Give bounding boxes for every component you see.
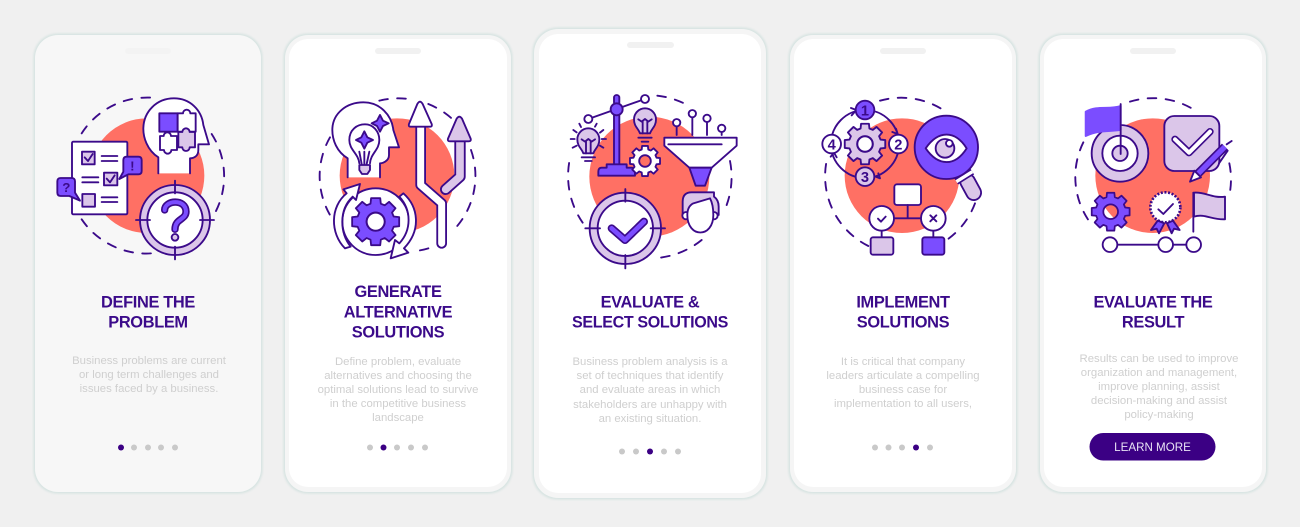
- heading: implement solutions: IMPLEMENT: [856, 294, 950, 312]
- body text: implement solutions: leaders articulate a compelling: [826, 370, 980, 382]
- illustration: implement solutions: [822, 98, 978, 255]
- body text: evaluate the result: decision-making and assist: [1091, 395, 1228, 407]
- heading: generate alternative solutions: GENERATE: [354, 283, 442, 301]
- body text: implement solutions: [826, 356, 980, 410]
- illustration: define the problem: !: [130, 158, 135, 173]
- illustration: generate alternative solutions: [320, 98, 475, 258]
- heading: define the problem: [101, 294, 195, 332]
- pagination dots: [367, 444, 428, 450]
- illustration: evaluate the result: [1075, 98, 1232, 252]
- body text: evaluate and select solutions: stakeholders are unhappy with: [573, 399, 727, 411]
- body text: implement solutions: It is critical that company: [841, 356, 965, 368]
- pagination dots: [619, 448, 681, 454]
- heading: implement solutions: [856, 294, 950, 332]
- heading: evaluate the result: EVALUATE THE: [1093, 294, 1213, 312]
- illustration: define the problem: ?: [62, 180, 70, 195]
- heading: evaluate and select solutions: SELECT SOLUTIONS: [572, 314, 728, 332]
- body text: evaluate the result: improve planning, assist: [1098, 381, 1221, 393]
- body text: generate alternative solutions: in the competitive business: [330, 398, 466, 410]
- panel: define the problem: [34, 34, 262, 494]
- body text: define the problem: issues faced by a business.: [80, 383, 218, 395]
- body text: generate alternative solutions: landscape: [372, 412, 424, 424]
- heading: generate alternative solutions: SOLUTIONS: [352, 324, 445, 342]
- body text: define the problem: [72, 355, 227, 395]
- body text: generate alternative solutions: Define problem, evaluate: [335, 356, 461, 368]
- panel: implement solutions: [788, 34, 1018, 494]
- heading: evaluate the result: RESULT: [1122, 314, 1184, 332]
- heading: generate alternative solutions: [344, 283, 453, 342]
- button: learn more: LEARN MORE: [1114, 441, 1191, 454]
- body text: generate alternative solutions: optimal solutions lead to survive: [318, 384, 478, 396]
- body text: evaluate and select solutions: Business problem analysis is a: [572, 356, 728, 368]
- body text: generate alternative solutions: alternatives and choosing the: [324, 370, 472, 382]
- heading: define the problem: PROBLEM: [108, 314, 188, 332]
- body text: define the problem: Business problems are current: [72, 355, 227, 367]
- pagination dots: [872, 444, 933, 450]
- body text: define the problem: or long term challenges and: [79, 369, 219, 381]
- heading: evaluate and select solutions: EVALUATE &: [601, 294, 700, 312]
- body text: evaluate the result: Results can be used to improve: [1080, 353, 1238, 365]
- panel: evaluate and select solutions: [532, 28, 768, 500]
- body text: implement solutions: implementation to all users,: [834, 398, 972, 410]
- body text: evaluate the result: policy-making: [1124, 409, 1194, 421]
- panel: generate alternative solutions: [284, 34, 512, 494]
- body text: evaluate and select solutions: and evaluate areas in which: [580, 384, 720, 396]
- body text: evaluate and select solutions: set of techniques that identify: [577, 370, 724, 382]
- illustration: implement solutions: 4: [828, 137, 837, 153]
- panel: evaluate the result: [1038, 34, 1268, 494]
- body text: generate alternative solutions: [318, 356, 478, 424]
- illustration: implement solutions: 1: [861, 103, 869, 119]
- illustration: define the problem: [57, 98, 224, 259]
- body text: evaluate the result: organization and management,: [1081, 367, 1237, 379]
- body text: evaluate and select solutions: an existing situation.: [599, 413, 701, 425]
- heading: evaluate the result: [1093, 294, 1213, 332]
- heading: evaluate and select solutions: [572, 294, 728, 332]
- heading: generate alternative solutions: ALTERNATIVE: [344, 304, 453, 322]
- button: learn more: [1090, 433, 1216, 460]
- body text: implement solutions: business case for: [859, 384, 947, 396]
- heading: implement solutions: SOLUTIONS: [857, 314, 950, 332]
- body text: evaluate and select solutions: [572, 356, 728, 425]
- illustration: implement solutions: 3: [861, 170, 869, 186]
- body text: evaluate the result: [1080, 353, 1238, 421]
- illustration: evaluate and select solutions: [568, 95, 737, 268]
- heading: define the problem: DEFINE THE: [101, 294, 195, 312]
- pagination dots: [118, 444, 178, 450]
- illustration: implement solutions: 2: [894, 137, 902, 153]
